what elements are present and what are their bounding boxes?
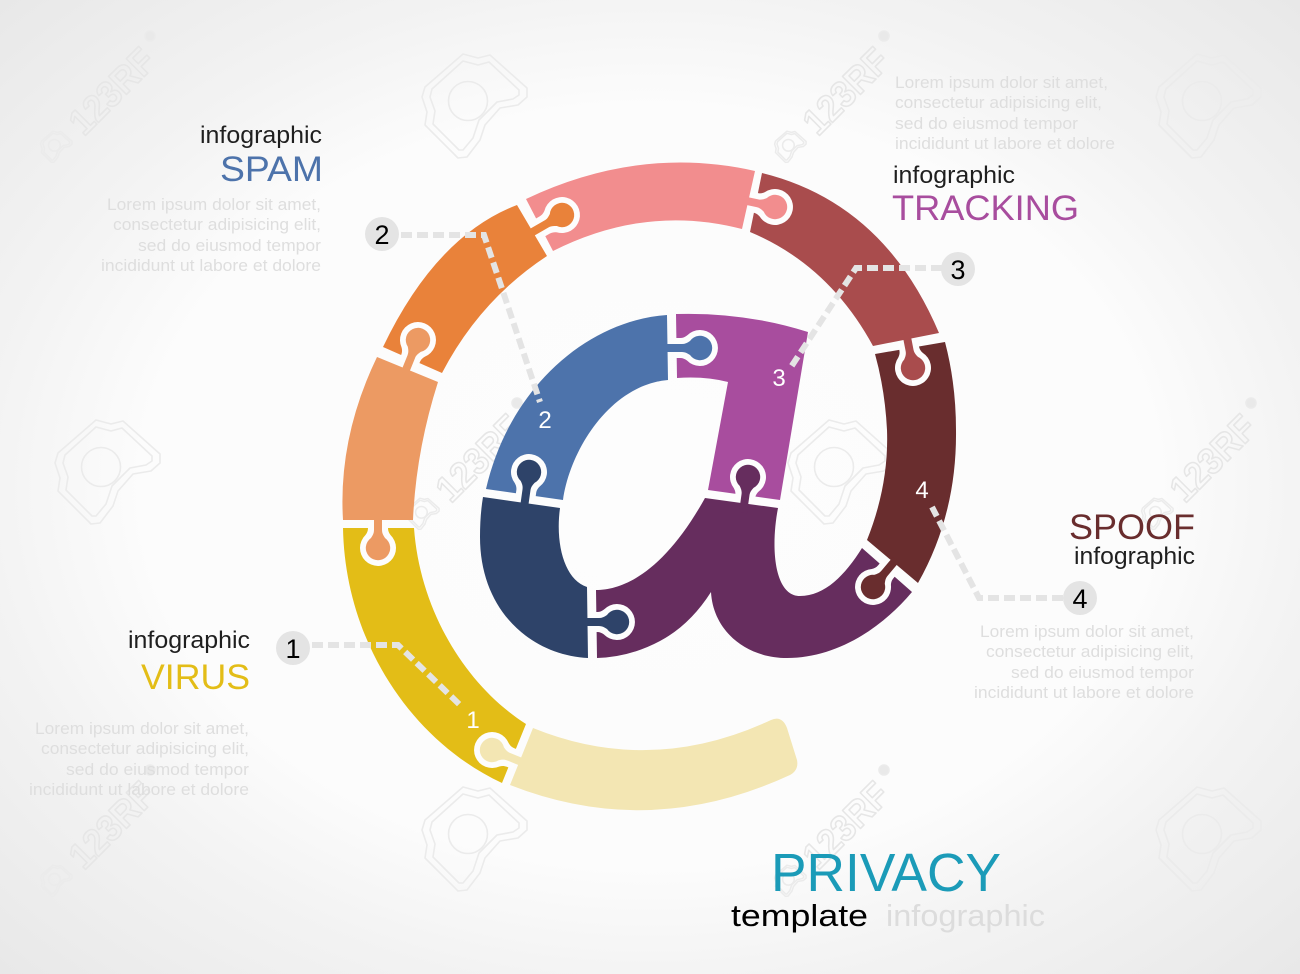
connector 3	[791, 268, 942, 367]
puzzle tab: brown into dark purple	[848, 548, 910, 612]
at symbol puzzle	[342, 163, 956, 810]
puzzle tab: brick into brown	[888, 329, 934, 389]
subtitle: template: template	[731, 898, 868, 933]
virus body text	[29, 720, 250, 799]
number badge 3: 3	[950, 255, 966, 285]
tracking body text	[895, 74, 1115, 153]
spam body text: Lorem ipsum dolor sit amet,	[107, 196, 321, 214]
puzzle tab: orange into pink	[522, 190, 587, 249]
tracking body text: Lorem ipsum dolor sit amet,	[895, 74, 1108, 92]
piece number 4: 4	[915, 477, 929, 504]
puzzle tab: pink into brick	[736, 182, 796, 228]
puzzle tab: navy into dark purple	[581, 604, 635, 640]
puzzle tab: light orange into orange	[388, 317, 441, 380]
spoof body text: consectetur adipisicing elit,	[986, 643, 1194, 661]
number badge 2	[365, 217, 399, 251]
connector 1	[312, 645, 460, 705]
connector 2	[401, 235, 540, 402]
virus body text: Lorem ipsum dolor sit amet,	[35, 720, 249, 738]
spoof body text: incididunt ut labore et dolore	[974, 684, 1194, 702]
spam body text: consectetur adipisicing elit,	[113, 216, 321, 234]
spam body text	[101, 196, 322, 275]
segment: dark brown	[867, 342, 956, 583]
spoof label: infographic	[1074, 543, 1195, 570]
spam heading: SPAM	[220, 150, 323, 189]
virus body text: consectetur adipisicing elit,	[41, 740, 249, 758]
segment: dark purple	[596, 498, 912, 658]
piece number 1: 1	[466, 707, 480, 734]
callout 3: tracking	[772, 74, 1115, 392]
segment: navy	[480, 497, 588, 658]
tracking body text: consectetur adipisicing elit,	[895, 94, 1102, 112]
connector 4	[932, 507, 1063, 598]
virus body text: sed do eiusmod tempor	[66, 761, 250, 779]
puzzle tab: cream into yellow	[469, 727, 532, 780]
spam body text: sed do eiusmod tempor	[138, 237, 322, 255]
piece number 3: 3	[772, 365, 786, 392]
spam body text: incididunt ut labore et dolore	[101, 257, 321, 275]
number badge 1	[276, 631, 310, 665]
callout 1: virus	[29, 627, 480, 799]
segment: magenta	[676, 314, 808, 500]
segment: medium blue	[486, 315, 668, 500]
number badge 4: 4	[1072, 584, 1088, 614]
virus body text: incididunt ut labore et dolore	[29, 781, 249, 799]
number badge 4	[1063, 581, 1097, 615]
puzzle tab: orange into yellow	[360, 512, 396, 566]
segment: brick red	[750, 173, 939, 346]
virus label: infographic	[128, 627, 250, 654]
spoof body text: sed do eiusmod tempor	[1011, 664, 1195, 682]
spoof body text	[974, 623, 1195, 702]
callout 4: spoof	[915, 477, 1195, 702]
number badge 1: 1	[285, 634, 301, 664]
segment: yellow	[343, 528, 526, 783]
tracking label: infographic	[893, 162, 1015, 189]
puzzle tab: blue into magenta	[664, 330, 718, 366]
subtitle: infographic: infographic	[886, 898, 1045, 933]
puzzle tab: navy into blue	[506, 452, 549, 510]
segment: pink	[526, 163, 755, 251]
number badge 2: 2	[374, 220, 390, 250]
number badge 3	[941, 252, 975, 286]
title: privacy: PRIVACY	[771, 843, 1001, 903]
tracking body text: incididunt ut labore et dolore	[895, 135, 1115, 153]
segment: orange	[383, 205, 547, 373]
spoof body text: Lorem ipsum dolor sit amet,	[980, 623, 1194, 641]
puzzle tab: dark purple into magenta	[725, 457, 768, 515]
spoof heading: SPOOF	[1069, 508, 1195, 547]
virus heading: VIRUS	[141, 658, 250, 697]
piece number 2: 2	[538, 407, 552, 434]
spam label: infographic	[200, 122, 322, 149]
title block	[731, 843, 1045, 933]
tracking body text: sed do eiusmod tempor	[895, 115, 1079, 133]
segment: light orange	[342, 357, 438, 520]
callout 2: spam	[101, 122, 552, 434]
tracking heading: TRACKING	[892, 189, 1079, 228]
segment: cream tail	[510, 719, 797, 810]
